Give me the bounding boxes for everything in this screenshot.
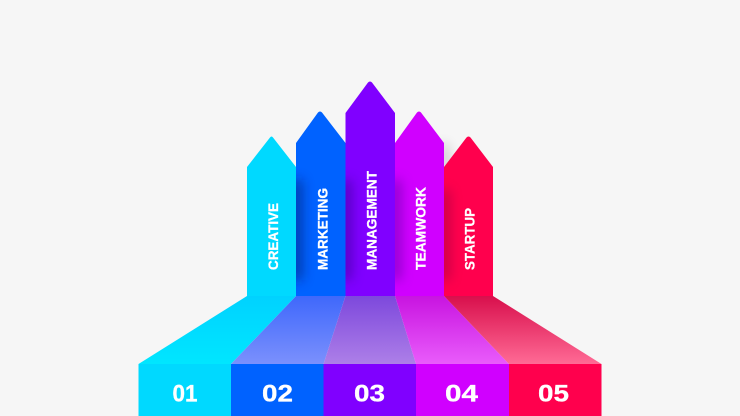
block 02: [231, 364, 324, 416]
arrow 3: management: [346, 82, 395, 296]
block 03: 03: [354, 380, 385, 408]
block 04: [416, 364, 509, 416]
block 05: 05: [538, 380, 569, 408]
arrow 3: management: MANAGEMENT: [364, 170, 379, 270]
block 03: [324, 364, 416, 416]
block 05: [509, 364, 602, 416]
arrow 1: creative: [247, 136, 296, 296]
arrow 4: teamwork: [395, 112, 444, 296]
arrow 2: marketing: MARKETING: [316, 188, 331, 270]
arrow 5: startup: [438, 136, 493, 296]
block 01: 01: [172, 380, 198, 408]
arrow 2: marketing: [296, 112, 346, 296]
block 04: 04: [445, 380, 478, 408]
floor: perspective panels: [138, 296, 602, 364]
infographic: five rising arrows on a perspective floor: [138, 82, 602, 416]
block 01: [138, 364, 231, 416]
arrow 5: startup: STARTUP: [462, 208, 477, 270]
arrow 4: teamwork: TEAMWORK: [413, 187, 428, 270]
block 02: 02: [262, 380, 293, 408]
arrow 1: creative: CREATIVE: [266, 203, 281, 270]
